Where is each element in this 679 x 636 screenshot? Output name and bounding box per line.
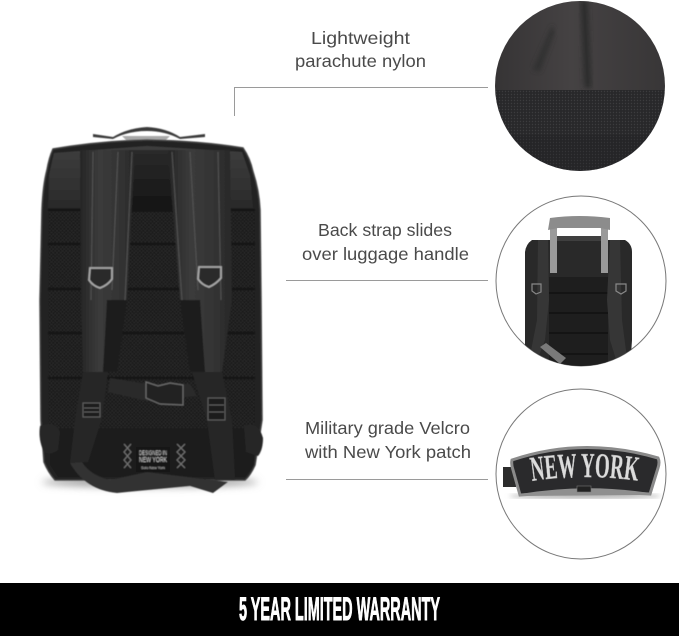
- top carry handle: [93, 127, 205, 139]
- right side bulge: [244, 424, 263, 456]
- luggage handle poles: [550, 228, 608, 273]
- detail circle: parachute nylon: [495, 0, 665, 172]
- dangling bottom straps: [70, 462, 228, 493]
- footer bar: [0, 583, 679, 636]
- velcro tab: [503, 467, 516, 487]
- mini D-rings: [532, 284, 626, 294]
- caption: velcro patch: Military grade Velcro: [305, 418, 470, 438]
- footer bar: 5 YEAR LIMITED WARRANTY: [239, 591, 440, 627]
- stitching right: [177, 444, 185, 468]
- leader line 3: [286, 478, 488, 480]
- bottom compartment: [50, 428, 254, 477]
- caption: lightweight parachute nylon: Lightweight: [311, 28, 410, 48]
- left side bulge: [40, 424, 60, 454]
- detail circle: luggage handle: [496, 196, 666, 372]
- backpack illustration: [40, 127, 263, 493]
- patch lower band: [520, 488, 650, 496]
- top fabric panel: [48, 146, 253, 208]
- caption: back strap: over luggage handle: [302, 244, 469, 264]
- patch tag: [577, 486, 591, 492]
- designed in New York label: NEW YORK: [139, 457, 167, 464]
- mini backpack centre panel: [549, 277, 608, 372]
- designed in New York label: Solo New York: [141, 465, 165, 470]
- backpack body: [40, 140, 262, 480]
- right shoulder strap: [168, 150, 232, 372]
- detail circle: New York patch: [496, 388, 666, 560]
- mini backpack body: [525, 240, 632, 370]
- left D-ring: [89, 268, 112, 288]
- patch shadow: [509, 494, 661, 498]
- caption: velcro patch: with New York patch: [304, 442, 471, 462]
- mini panel dividers: [549, 293, 608, 354]
- back mesh padding: [48, 210, 255, 428]
- patch lettering: NEW YORK: [529, 454, 640, 482]
- caption: back strap: Back strap slides: [318, 220, 452, 240]
- leader line 1: [234, 88, 488, 116]
- caption: lightweight parachute nylon: parachute nylon: [295, 51, 426, 71]
- designed in New York label: DESIGNED IN: [139, 451, 167, 457]
- designed in New York label: [136, 447, 170, 472]
- mini lower grey strap: [540, 343, 566, 364]
- luggage handle grip: [548, 216, 610, 230]
- caption: lightweight parachute nylon: [295, 28, 426, 71]
- chest buckle: [146, 382, 183, 405]
- right D-ring: [198, 267, 221, 287]
- caption: back strap: [302, 220, 469, 264]
- caption: velcro patch: [304, 418, 471, 462]
- centre dark panel: [127, 150, 178, 212]
- leader line 2: [286, 280, 488, 282]
- left lower strap and adjuster: [70, 372, 108, 463]
- chest strap: [108, 378, 197, 401]
- mini straps: [532, 240, 626, 358]
- zipper pulls: [122, 136, 170, 140]
- right lower strap and adjuster: [192, 372, 235, 480]
- stitching left: [124, 444, 131, 468]
- left shoulder strap: [80, 150, 135, 372]
- ground shadow: [42, 477, 258, 487]
- mini zipper band: [557, 236, 601, 241]
- patch badge: [512, 447, 659, 495]
